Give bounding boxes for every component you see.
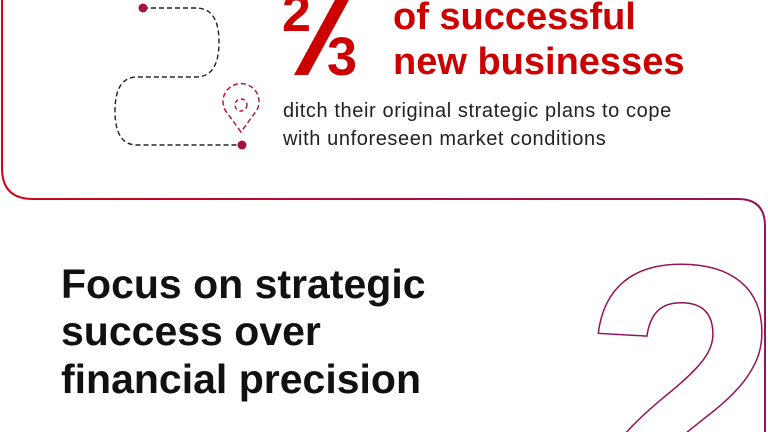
heading: section 2: Focus on strategic <box>61 261 426 307</box>
stat: two thirds fraction: 3 <box>327 27 357 87</box>
stat: two thirds fraction <box>284 0 356 76</box>
heading: section 2: success over <box>61 308 321 354</box>
icon: dashed route <box>115 4 259 150</box>
heading: section 2: financial precision <box>61 356 421 402</box>
stat description: ditch their original strategic plans to cope <box>283 100 672 122</box>
stat description: with unforeseen market conditions <box>282 128 606 150</box>
stat headline: new businesses <box>393 41 684 83</box>
